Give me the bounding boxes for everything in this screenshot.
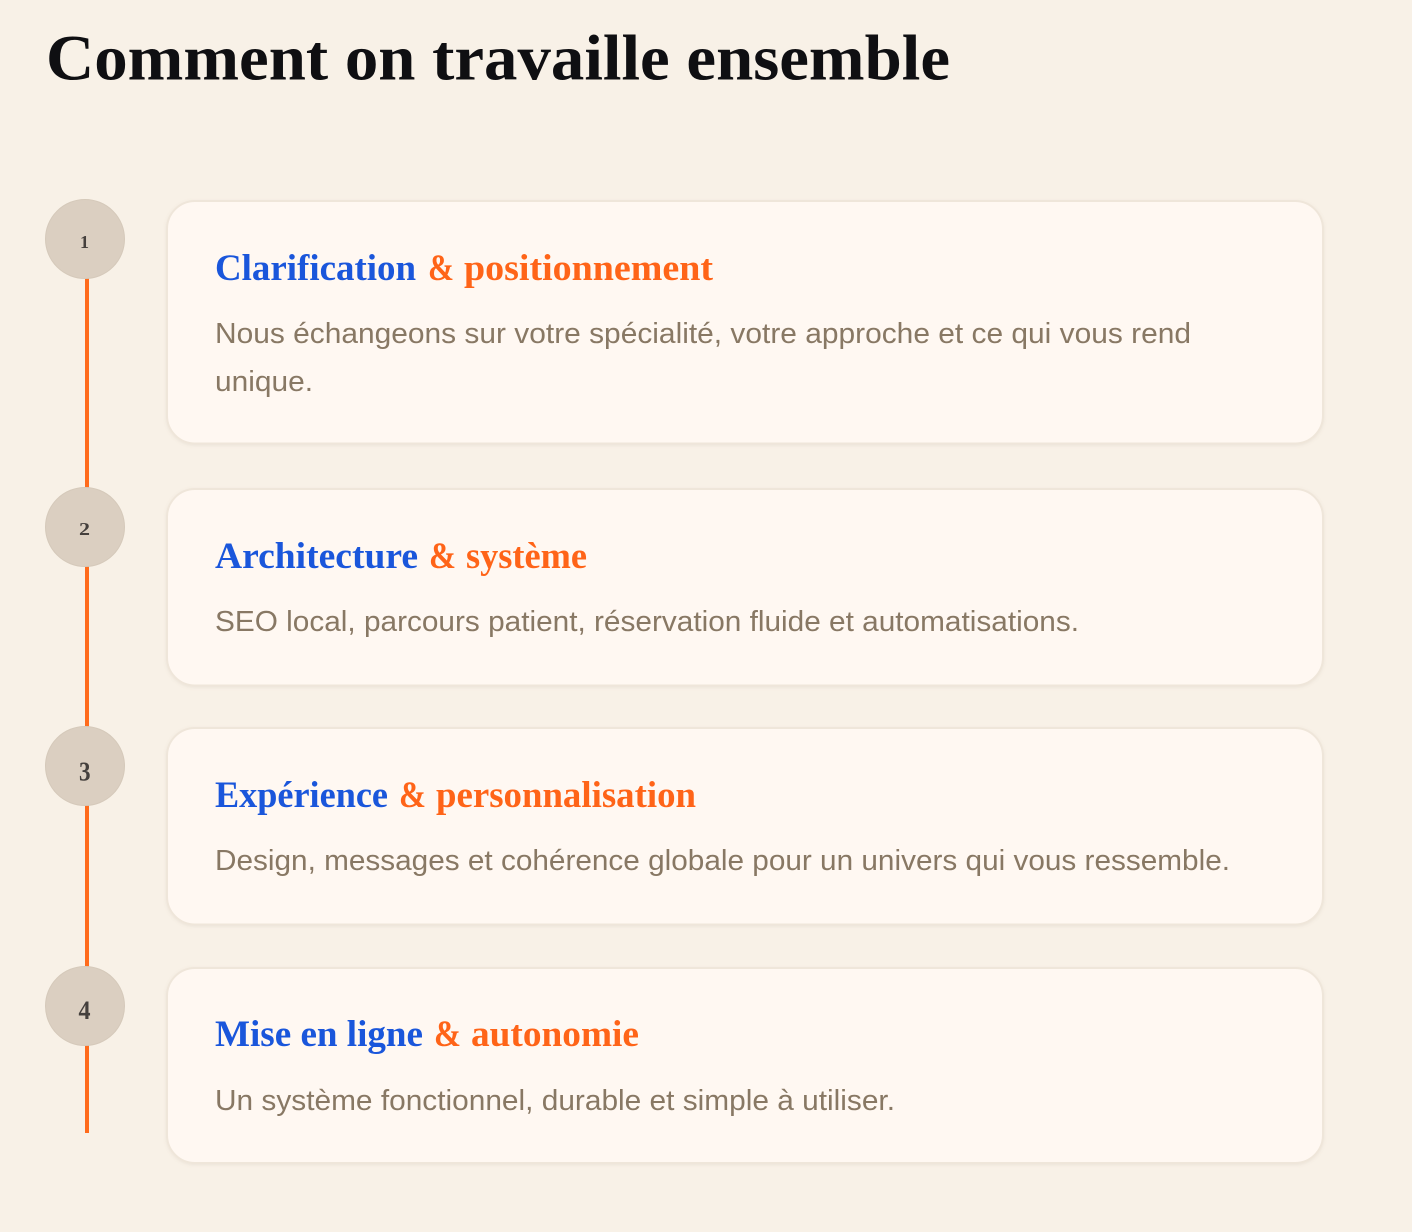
- step 4 description: Un système fonctionnel, durable et simple à utiliser.: [215, 1085, 895, 1117]
- step 1 heading: &: [428, 248, 454, 289]
- step 3: [46, 726, 1323, 924]
- step 3 heading: personnalisation: [436, 775, 696, 816]
- step 2 heading: Architecture: [215, 536, 418, 577]
- step 4 heading: [215, 1014, 639, 1055]
- step 1: [46, 200, 1323, 444]
- step 1 heading: positionnement: [464, 248, 714, 289]
- step 3 heading: [215, 775, 696, 816]
- step 3 heading: &: [399, 775, 426, 816]
- step 1 description: Nous échangeons sur votre spécialité, votre approche et ce qui vous rend: [215, 318, 1191, 350]
- step 1 description: unique.: [215, 366, 313, 398]
- step 1 number badge: [46, 200, 124, 278]
- step 4: [46, 966, 1323, 1163]
- timeline line: [85, 239, 89, 1133]
- step 1 heading: Clarification: [215, 248, 416, 289]
- step 4 number badge: [46, 966, 124, 1046]
- step 3 description: Design, messages et cohérence globale pour un univers qui vous ressemble.: [215, 845, 1230, 877]
- step 1 heading: [215, 248, 714, 289]
- step 1 number badge: 1: [80, 232, 89, 252]
- step 2 heading: [215, 536, 587, 577]
- step 1 card: [167, 201, 1323, 444]
- step 1 description: [215, 318, 1191, 398]
- title: Comment on travaille ensemble: [46, 22, 950, 94]
- step 4 number badge: 4: [78, 996, 90, 1025]
- step 4 card: [167, 968, 1323, 1163]
- step 2 heading: système: [466, 536, 587, 577]
- step 3 number badge: 3: [79, 756, 90, 786]
- step 2 card: [167, 489, 1323, 686]
- step 2 heading: &: [429, 536, 456, 577]
- step 4 heading: &: [434, 1014, 461, 1055]
- step 4 heading: autonomie: [471, 1014, 639, 1055]
- step 3 card: [167, 728, 1323, 924]
- step 3 number badge: [46, 726, 124, 806]
- step 2 number badge: [46, 488, 124, 566]
- step 4 heading: Mise en ligne: [215, 1014, 423, 1055]
- step 3 heading: Expérience: [215, 775, 388, 816]
- step 2: [46, 488, 1323, 686]
- step 2 number badge: 2: [79, 519, 90, 539]
- step 2 description: SEO local, parcours patient, réservation fluide et automatisations.: [215, 606, 1079, 638]
